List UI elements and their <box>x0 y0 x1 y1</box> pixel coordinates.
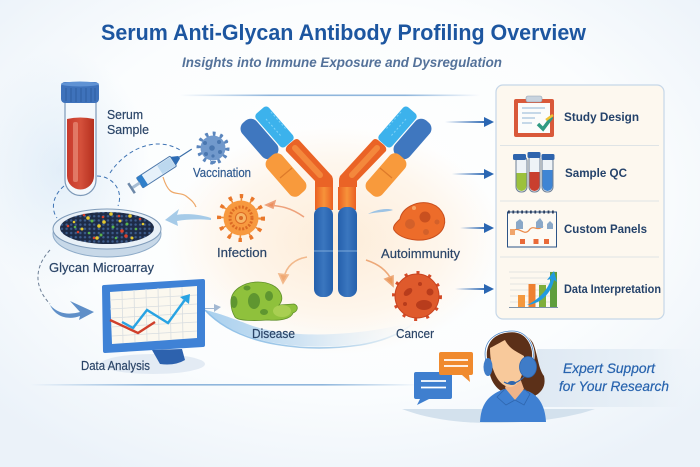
icon: cancer cell <box>395 274 439 318</box>
icon: infection virus <box>219 196 263 240</box>
arrow: into monitor <box>50 301 94 320</box>
label: study design: Study Design <box>564 110 639 124</box>
icon: vaccination virus <box>198 133 228 163</box>
icon: sample tubes <box>513 152 554 192</box>
label: vaccination: Vaccination <box>193 165 251 180</box>
dashed connectors <box>38 144 180 304</box>
label: sample qc: Sample QC <box>565 166 627 180</box>
left arm <box>237 105 333 200</box>
label: cancer: Cancer <box>396 326 435 341</box>
speech bubble: orange <box>439 352 473 382</box>
right arm <box>339 105 435 200</box>
arrows to services <box>445 117 494 294</box>
panel: expert support <box>402 330 700 423</box>
icon: calendar panel <box>508 212 556 247</box>
support text <box>559 360 669 394</box>
icon: serum tube <box>61 82 99 195</box>
hinge <box>315 187 356 210</box>
swoosh near autoimmunity <box>368 209 393 214</box>
label: glycan microarray: Glycan Microarray <box>49 260 154 275</box>
icon: autoimmunity cell <box>394 203 445 240</box>
support agent <box>480 330 546 422</box>
speech bubble: blue <box>414 372 452 405</box>
arrow: infection to microarray <box>165 209 211 226</box>
label: data analysis: Data Analysis <box>81 358 150 373</box>
label: autoimmunity: Autoimmunity <box>381 246 461 261</box>
panel: services <box>496 85 664 319</box>
label: custom panels: Custom Panels <box>564 222 647 236</box>
label: infection: Infection <box>217 245 267 260</box>
title: Serum Anti-Glycan Antibody Profiling Overview <box>101 20 587 45</box>
arrow: monitor to disease <box>205 304 221 312</box>
arrow: antibody to infection <box>266 201 304 217</box>
label: serum sample: Serum <box>107 107 143 122</box>
icon: syringe <box>127 144 195 194</box>
icon: data analysis monitor <box>101 279 205 374</box>
label: disease: Disease <box>252 326 295 341</box>
subtitle: Insights into Immune Exposure and Dysregulation <box>182 54 502 70</box>
icon: antibody <box>237 105 435 297</box>
orange wire <box>163 177 196 207</box>
callout band <box>537 349 700 407</box>
arrow: antibody to cancer <box>366 260 393 286</box>
arrow: antibody to disease <box>279 257 307 283</box>
icon: clipboard <box>514 96 554 137</box>
label: serum sample <box>107 107 149 137</box>
support text: Expert Support <box>563 360 656 376</box>
icon: bar chart <box>509 271 558 308</box>
icon: disease blob <box>230 282 297 321</box>
icon: glycan microarray dish <box>53 209 161 257</box>
label: serum sample: Sample <box>107 122 149 137</box>
support base <box>402 409 595 423</box>
support text: for Your Research <box>559 378 669 394</box>
label: data interpretation: Data Interpretation <box>564 282 661 296</box>
stem <box>314 207 357 297</box>
